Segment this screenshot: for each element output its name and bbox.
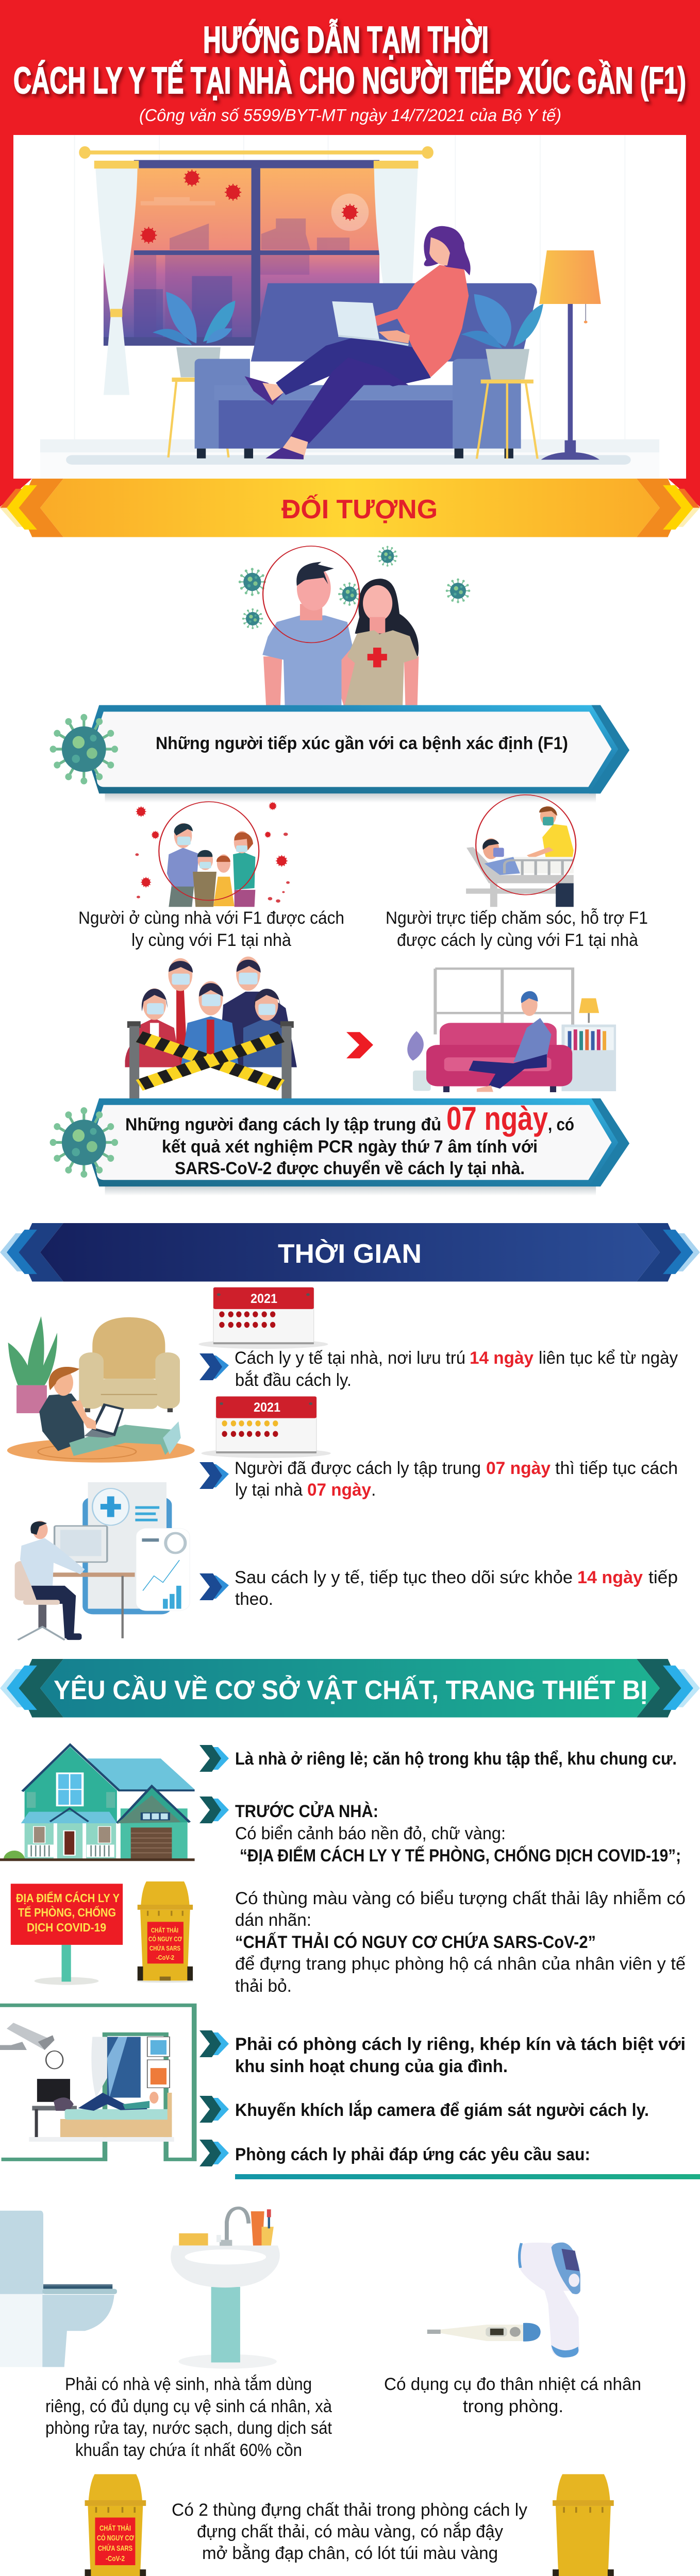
heading banner: THỜI GIAN [0, 1223, 700, 1282]
bullet: front door sign [199, 1797, 681, 1866]
title [13, 19, 686, 101]
curtains and rod [79, 146, 434, 395]
text: bin label: CHẤT THẢI [151, 1926, 178, 1934]
icon: yellow waste bin [137, 1882, 194, 1982]
text: two waste bins: mở bằng đạp chân, có lót túi màu vàng [202, 2544, 498, 2563]
text: household member: ly cùng với F1 tại nhà [131, 930, 291, 950]
bullet: continue home quarantine 07 days: . [371, 1480, 376, 1500]
text: two waste bins: đựng chất thải, có màu vàng, có nắp đậy [197, 2522, 503, 2541]
section: time illustrations [7, 1287, 331, 1640]
sofa [195, 283, 537, 459]
text: bin label [148, 1926, 182, 1961]
text: private toilet: Phải có nhà vệ sinh, nhà tắm dùng [65, 2375, 312, 2394]
bullet: room requirements [199, 2140, 590, 2166]
section: facility illustrations [0, 1745, 195, 2159]
text block: yellow bin: thải bỏ. [235, 1976, 292, 1996]
illustration: caregiver and patient [466, 795, 576, 907]
bullet: continue home quarantine 07 days: 07 ngày [486, 1459, 551, 1478]
illustration: family with masks [135, 802, 290, 907]
text: thermometer: trong phòng. [463, 2397, 563, 2416]
text: calendar year labels [251, 1292, 280, 1415]
bullet: continue home quarantine 07 days: 07 ngày [307, 1480, 371, 1500]
bullet: home quarantine 14 days [199, 1348, 678, 1390]
callout: concentrated quarantine: kết quả xét nghiệm PCR ngày thứ 7 âm tính với [162, 1137, 538, 1157]
bullet: monitor health 14 days: theo. [235, 1589, 273, 1609]
bullet: private house [199, 1745, 677, 1772]
bullet: private room [199, 2030, 686, 2076]
illustration: health monitoring doctor [15, 1482, 190, 1640]
woman with laptop [245, 226, 471, 460]
text: thermometer: Có dụng cụ đo thân nhiệt cá nhân [384, 2375, 641, 2394]
icon: calendar 14 days [198, 1287, 328, 1349]
bullet: home quarantine 14 days: liên tục kể từ ngày [539, 1348, 678, 1368]
bullet: private room: Phải có phòng cách ly riêng, khép kín và tách biệt với [235, 2035, 686, 2054]
text: direct caregiver: được cách ly cùng với F1 tại nhà [397, 930, 638, 950]
icon: calendar 07 days [202, 1397, 331, 1458]
heading banner: ĐỐI TƯỢNG: ĐỐI TƯỢNG [281, 494, 438, 524]
text: private toilet [45, 2375, 332, 2460]
text block: yellow bin: dán nhãn: [235, 1910, 311, 1930]
bullet: continue home quarantine 07 days: Người đã được cách ly tập trung [235, 1459, 481, 1478]
illustration: man with laptop and armchair [7, 1316, 195, 1463]
text: household member: Người ở cùng nhà với F1 được cách [78, 908, 344, 928]
bullet: private room: khu sinh hoạt chung của gia đình. [235, 2057, 508, 2076]
bullet: home quarantine 14 days: bắt đầu cách ly. [235, 1370, 352, 1390]
section: room requirement illustrations [0, 2208, 615, 2576]
text: calendar year labels: 2021 [251, 1292, 277, 1306]
text: direct caregiver: Người trực tiếp chăm sóc, hỗ trợ F1 [386, 908, 648, 928]
illustration: warning sign [11, 1884, 123, 1985]
text block: yellow bin [235, 1889, 686, 1996]
title: HƯỚNG DẪN TẠM THỜI [203, 19, 489, 61]
heading banner: facility requirements [0, 1659, 700, 1718]
text: bin label 2 [97, 2524, 134, 2563]
bullet: camera: Khuyến khích lắp camera để giám sát người cách ly. [235, 2100, 649, 2120]
text: bin label: CHỨA SARS [149, 1944, 180, 1952]
callout: concentrated quarantine: SARS-CoV-2 được chuyển về cách ly tại nhà. [175, 1159, 525, 1178]
illustration: house [0, 1745, 195, 1861]
text: bin label 2: CHẤT THẢI [99, 2524, 131, 2533]
text: bin label 2: CHỨA SARS [98, 2544, 132, 2553]
callout: concentrated quarantine [50, 1098, 629, 1196]
text: F1 definition: Những người tiếp xúc gần với ca bệnh xác định (F1) [156, 734, 568, 753]
bullet: monitor health 14 days [199, 1568, 678, 1609]
bullet: home quarantine 14 days: 14 ngày [470, 1348, 534, 1368]
bullet: front door sign: Có biển cảnh báo nền đỏ, chữ vàng: [235, 1824, 506, 1843]
text: calendar year labels: 2021 [254, 1400, 280, 1415]
bullet: camera [199, 2096, 649, 2123]
text: bin label: -CoV-2 [156, 1954, 174, 1961]
panel: header [0, 0, 700, 507]
bullet: monitor health 14 days: 14 ngày [577, 1568, 643, 1587]
illustration: woman working on sofa at home [40, 135, 659, 479]
illustration: thermometers [427, 2243, 580, 2358]
illustration: isolation room [0, 2005, 194, 2159]
bullet: continue home quarantine 07 days: ly tại nhà [235, 1480, 303, 1500]
bullet: continue home quarantine 07 days: thì tiếp tục cách [555, 1459, 678, 1478]
text: warning sign [16, 1891, 120, 1934]
heading banner: THỜI GIAN: THỜI GIAN [278, 1239, 422, 1269]
bullet: monitor health 14 days: Sau cách ly y tế, tiếp tục theo dõi sức khỏe [235, 1568, 573, 1587]
illustration: washbasin [171, 2208, 280, 2369]
callout: F1 definition [50, 705, 629, 803]
bullet: home quarantine 14 days: Cách ly y tế tại nhà, nơi lưu trú [235, 1348, 465, 1368]
bullet: room requirements: Phòng cách ly phải đáp ứng các yêu cầu sau: [235, 2145, 590, 2164]
bullet: monitor health 14 days: tiếp [648, 1568, 678, 1587]
panel: hero illustration [13, 135, 686, 479]
illustration: person relaxing at home [407, 969, 616, 1092]
left plant and stool [153, 292, 235, 457]
icon: viruses around couple [239, 546, 470, 629]
callout: concentrated quarantine: , có [548, 1115, 574, 1134]
heading banner: ĐỐI TƯỢNG [0, 479, 700, 537]
illustration: toilet [0, 2211, 117, 2367]
text: household member [78, 908, 344, 950]
text: warning sign: DỊCH COVID-19 [27, 1921, 106, 1934]
text: bin label 2: -CoV-2 [106, 2554, 125, 2563]
text block: yellow bin: Có thùng màu vàng có biểu tượng chất thải lây nhiễm có [235, 1889, 686, 1908]
arrow: red chevron [346, 1032, 373, 1058]
text: two waste bins: Có 2 thùng đựng chất thải trong phòng cách ly [172, 2500, 527, 2520]
callout: concentrated quarantine: Những người đang cách ly tập trung đủ [125, 1115, 441, 1134]
text: private toilet: riêng, có đủ dụng cụ vệ sinh cá nhân, xà [45, 2397, 332, 2416]
icon: general waste bin [552, 2474, 615, 2576]
text: two waste bins [172, 2500, 527, 2563]
subtitle: (Công văn số 5599/BYT-MT ngày 14/7/2021 của Bộ Y tế) [139, 106, 561, 125]
text: bin label: CÓ NGUY CƠ [148, 1935, 182, 1943]
text: private toilet: phòng rửa tay, nước sạch, dung dịch sát [45, 2418, 332, 2438]
text: warning sign: ĐỊA ĐIỂM CÁCH LY Y [16, 1891, 120, 1905]
section: concentrated quarantine to home [125, 957, 616, 1098]
heading banner: facility requirements: YÊU CẦU VỀ CƠ SỞ VẬT CHẤT, TRANG THIẾT BỊ [54, 1675, 647, 1705]
right plant and stool [461, 294, 543, 459]
text: bin label 2: CÓ NGUY CƠ [97, 2533, 134, 2543]
text: thermometer [384, 2375, 641, 2416]
window [104, 160, 379, 346]
text block: yellow bin: “CHẤT THẢI CÓ NGUY CƠ CHỨA SARS-CoV-2” [235, 1933, 596, 1952]
text block: yellow bin: để đựng trang phục phòng hộ cá nhân của nhân viên y tế [235, 1954, 686, 1974]
text: warning sign: TẾ PHÒNG, CHỐNG [18, 1905, 116, 1919]
illustration: masked people behind barricade [125, 957, 297, 1098]
bullet: front door sign: TRƯỚC CỬA NHÀ: [235, 1802, 378, 1821]
bullet: continue home quarantine 07 days [199, 1459, 678, 1500]
callout: concentrated quarantine: 07 ngày [446, 1100, 548, 1137]
text: private toilet: khuẩn tay chứa ít nhất 60% cồn [75, 2441, 302, 2460]
text: direct caregiver [386, 908, 648, 950]
icon: labelled waste bin [84, 2474, 147, 2576]
floor lamp [539, 250, 601, 460]
section: F1 couple and callouts [50, 546, 629, 907]
illustration: couple [262, 546, 419, 706]
